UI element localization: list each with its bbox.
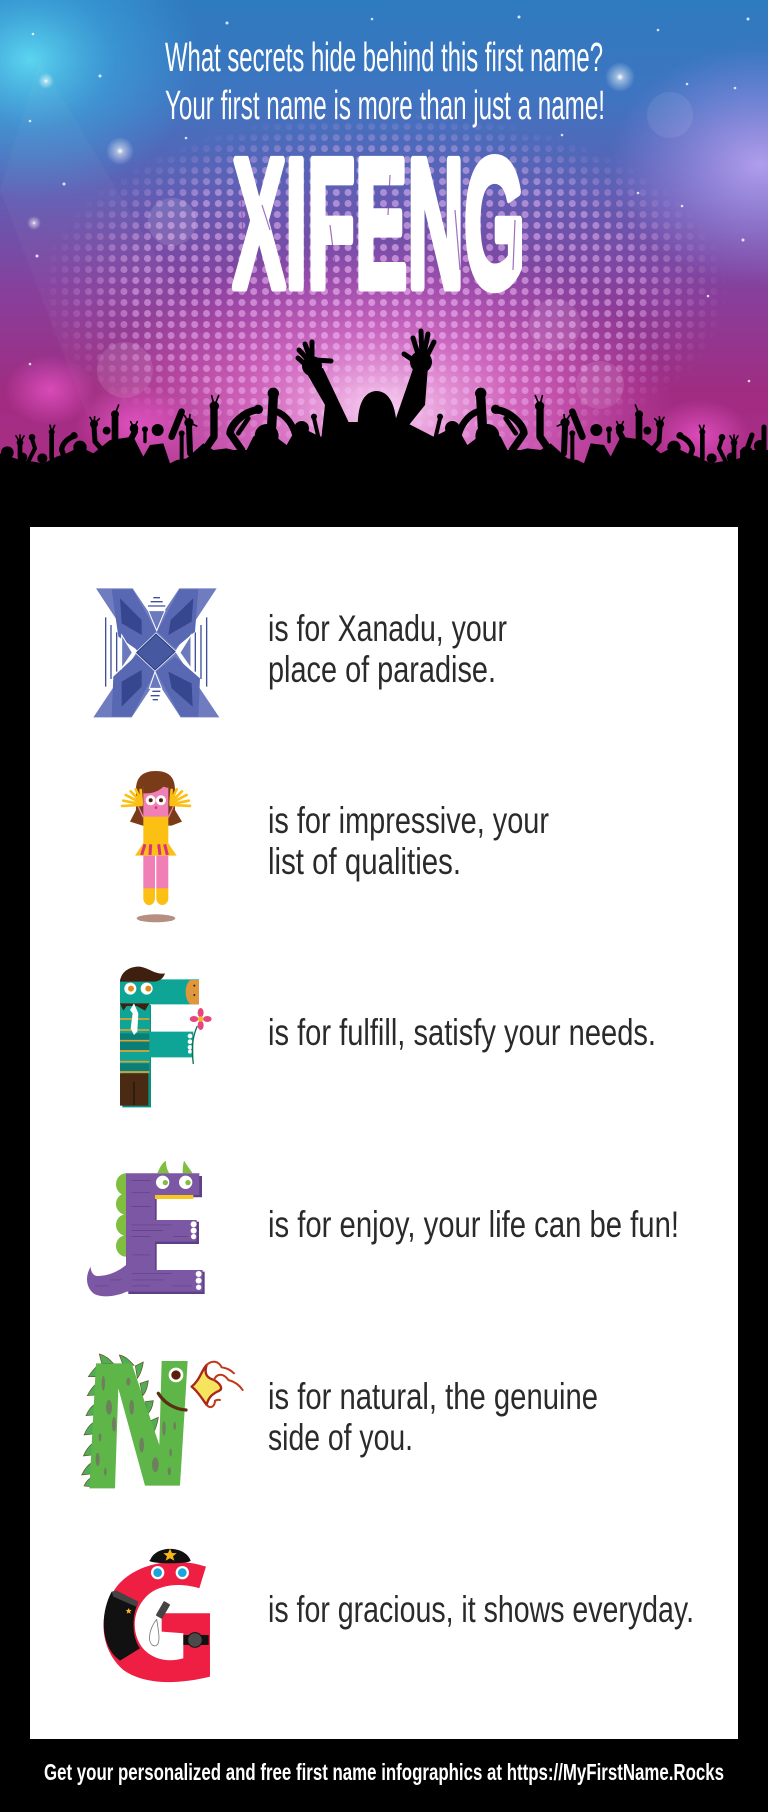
text: F line: is for fulfill, satisfy your needs.	[268, 1012, 656, 1053]
icon: letter E dinosaur	[87, 1161, 205, 1296]
item: X	[93, 588, 507, 717]
white content panel	[30, 527, 738, 1739]
item: E	[87, 1161, 679, 1296]
text: X line: place of paradise.	[268, 649, 496, 690]
text: X line	[268, 608, 507, 690]
text: I line: list of qualities.	[268, 841, 461, 882]
text: I line	[268, 800, 549, 882]
icon: letter N dragon	[82, 1354, 243, 1488]
item: N	[82, 1354, 598, 1488]
tagline	[165, 34, 605, 128]
text: N line: is for natural, the genuine	[268, 1376, 598, 1417]
icon: letter X	[93, 588, 219, 717]
name title	[233, 120, 525, 326]
crowd silhouette	[0, 331, 768, 530]
text: N line: side of you.	[268, 1417, 413, 1458]
item: I	[122, 771, 549, 922]
icon: letter F gentleman	[120, 967, 212, 1107]
item: G	[104, 1549, 694, 1682]
header background: stage lights	[0, 0, 768, 464]
text: X line: is for Xanadu, your	[268, 608, 507, 649]
text: N line	[268, 1376, 598, 1458]
item: F	[120, 967, 656, 1107]
icon: letter G police officer	[104, 1549, 210, 1682]
text: I line: is for impressive, your	[268, 800, 549, 841]
icon: letter I cheerleader	[122, 771, 190, 922]
